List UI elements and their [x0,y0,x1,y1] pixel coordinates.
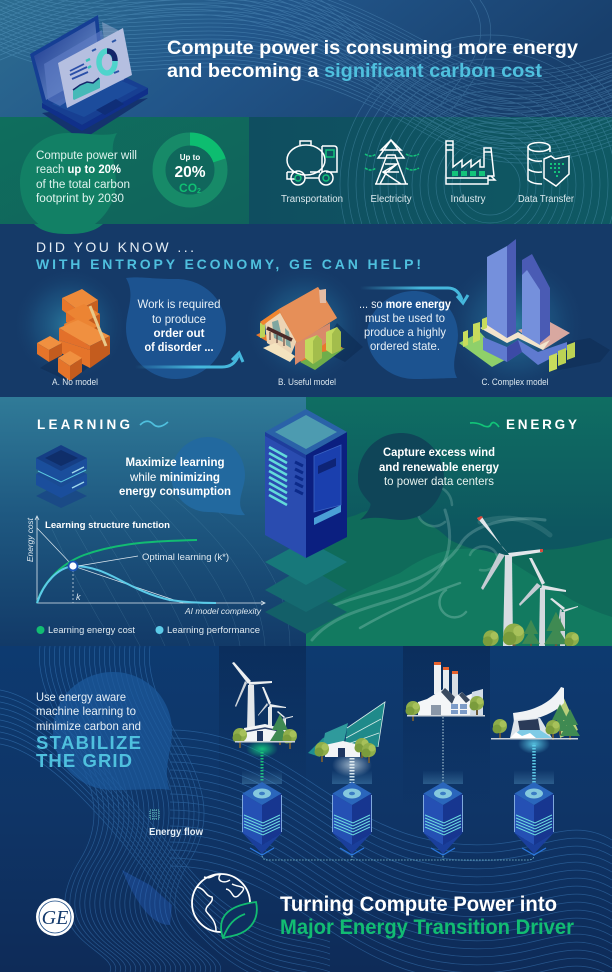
callout: work is required: to produce [152,312,206,326]
callout: stabilize bubble [53,672,172,790]
icon: globe with leaf [192,874,257,938]
chart: 20 percent donut: CO [179,181,197,195]
heading: did you know: DID YOU KNOW ... [36,239,194,255]
illustration: wind plant [232,662,297,749]
decorative blue swoosh [122,870,172,925]
callout: compute power forecast: reach up to 20% [36,164,121,176]
illustration: factory [406,662,485,721]
label: electricity: Electricity [370,194,412,205]
chart: learning structure function: Optimal learning (k*) [142,552,229,563]
icon: energy wave [470,423,499,427]
callout: capture excess wind [358,433,499,520]
callout: more energy: ... so more energy [359,297,451,311]
arrow: to useful model [135,353,243,367]
label: no model: A. No model [52,377,98,387]
icon: data transfer shield [528,142,569,186]
callout: work is required [126,277,226,379]
icon: pile of bricks (no model) [37,289,110,382]
callout: compute power forecast [20,133,137,234]
heading: main title [167,37,578,82]
legend: learning chart [36,625,260,636]
label: energy flow: Energy flow [149,826,204,838]
illustration: solar plant [308,702,385,763]
heading: stabilize the grid: THE GRID [36,750,132,771]
energy flow lines [262,717,534,860]
logo: GE [36,898,74,936]
heading: closing title: Major Energy Transition Driver [280,916,574,939]
panel: learning [0,397,306,646]
callout: capture excess wind: Capture excess wind [383,445,495,459]
heading: stabilize the grid [36,732,141,771]
illustration: server 2 [332,770,372,855]
logo: GE: GE [42,907,68,929]
arrow: to complex model [360,288,468,303]
chart: learning structure function: k [76,592,81,602]
callout: capture excess wind: to power data centers [384,474,494,488]
heading: with entropy economy: WITH ENTROPY ECONOMY, GE CAN HELP! [36,256,421,272]
heading: energy: ENERGY [506,417,577,432]
chart: learning structure function: Energy cost [25,517,35,562]
section: header background [0,0,612,118]
illustration: server 1 [242,770,282,855]
callout: compute power forecast: Compute power will [36,150,137,162]
icon: stacked servers [36,445,87,508]
callout: work is required: Work is required [138,297,220,311]
chart: learning structure function: AI model complexity [184,606,262,616]
callout: maximize learning: energy consumption [119,484,231,498]
panel: stabilize the grid [0,646,612,972]
icon: energy flow marker [150,810,159,819]
callout: maximize learning: while minimizing [129,470,220,484]
stack of teal plates under server [265,540,347,634]
label: complex model: C. Complex model [482,377,548,387]
icon: skyscrapers (complex model) [459,239,610,372]
heading: closing title [280,893,574,939]
section: carbon sources right background [249,117,612,224]
illustration: hills [306,509,612,646]
icon: industry factory [446,141,495,184]
callout: more energy: ordered state. [370,339,440,353]
legend: learning chart: Learning performance [167,625,260,636]
heading: stabilize the grid: STABILIZE [36,732,141,753]
panel: did you know [0,224,612,397]
section: carbon stats left background [0,117,249,224]
icon: laptop with dashboard [30,15,148,140]
text: use energy aware: Use energy aware [36,690,126,704]
heading: closing title: Turning Compute Power into [280,893,557,916]
text: use energy aware: minimize carbon and [36,719,141,733]
chart: learning structure function: Learning structure function [45,520,170,531]
chart: 20 percent donut: 2 [197,188,201,195]
label: transportation: Transportation [281,194,343,205]
chart: 20 percent donut: 20% [174,164,206,181]
text: use energy aware: machine learning to [36,704,136,718]
icon: electricity pylon [365,140,419,184]
chart: learning structure function [25,516,265,616]
illustration: wind swirls [312,486,550,640]
heading: main title: Compute power is consuming more energy [167,37,578,59]
legend: learning chart: Learning energy cost [48,625,135,636]
callout: more energy: produce a highly [364,325,446,339]
icon: transportation truck [287,141,337,185]
decorative bubble overflow [34,224,103,234]
chart: 20 percent donut: Up to [180,153,200,162]
illustration: server 4 [514,770,554,855]
text: use energy aware [36,690,141,733]
illustration: server 3 [423,770,463,855]
glows under facilities [246,734,550,777]
icon: house (useful model) [256,287,363,370]
illustration: hydro dam [491,687,580,740]
label: useful model: B. Useful model [278,377,336,387]
panel: energy [306,397,612,646]
callout: compute power forecast: of the total carbon [36,179,130,191]
callout: compute power forecast: footprint by 2030 [36,193,124,205]
label: data transfer: Data Transfer [518,194,575,205]
icon: learning wave [140,421,168,427]
callout: capture excess wind: and renewable energy [379,460,499,474]
callout: work is required: of disorder ... [144,340,214,354]
label: industry: Industry [450,194,486,205]
heading: main title: and becoming a significant carbon cost [167,60,543,82]
chart: 20 percent donut [159,139,221,201]
heading: learning: LEARNING [37,417,130,432]
callout: maximize learning: Maximize learning [126,455,224,469]
illustration: wind turbines [477,516,579,654]
callout: maximize learning [119,437,245,515]
callout: more energy [359,291,458,379]
callout: work is required: order out [154,326,205,340]
illustration: central server [265,409,347,558]
callout: more energy: must be used to [365,311,445,325]
